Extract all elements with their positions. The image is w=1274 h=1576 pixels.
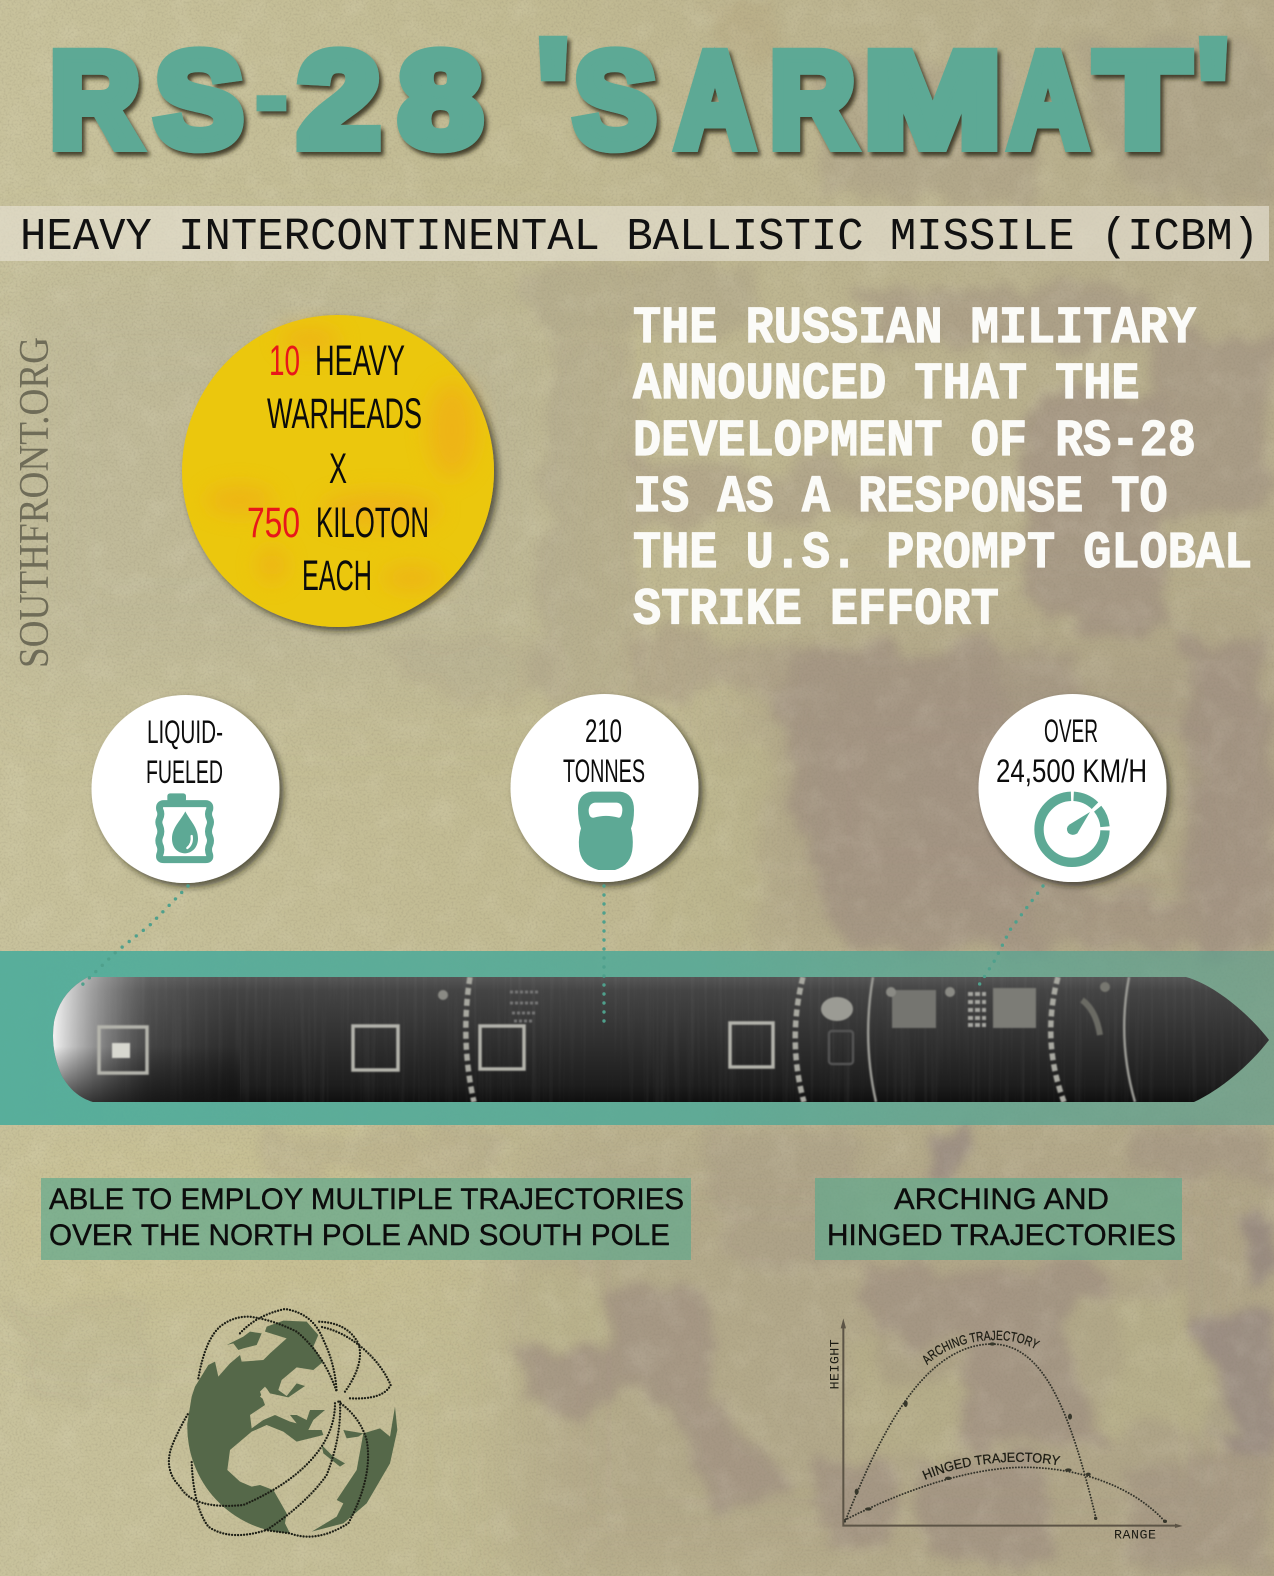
title: R [770, 26, 855, 175]
statement text: ANNOUNCED THAT THE [633, 355, 1140, 414]
label: FUELED [146, 754, 223, 790]
trajectory chart: HINGED TRAJECTORY [922, 1452, 1060, 1480]
trajectory chart: HEIGHT [829, 1339, 844, 1389]
title: S [574, 26, 656, 175]
missile hatches [99, 1023, 773, 1073]
icon: speedometer [1039, 796, 1105, 862]
title: A [676, 26, 754, 175]
label: LIQUID- [147, 714, 223, 750]
icon: kettlebell [578, 792, 634, 870]
subtitle: HEAVY INTERCONTINENTAL BALLISTIC MISSILE (ICBM) [20, 211, 1259, 263]
trajectory chart: ARCHING TRAJECTORY [922, 1330, 1040, 1366]
label: 24,500 KM/H [996, 753, 1147, 789]
curve markers [855, 1342, 1167, 1523]
statement text: THE U.S. PROMPT GLOBAL [633, 524, 1252, 583]
title: ' [538, 14, 568, 163]
hinged curve [845, 1467, 1165, 1522]
warheads text [247, 337, 429, 600]
missile panels and markings [438, 982, 1110, 1035]
teal missile band [0, 951, 1274, 1125]
dotted leader lines [82, 886, 1043, 1028]
title: R [50, 26, 140, 175]
warheads text: X [329, 445, 347, 493]
title: - [252, 18, 291, 167]
title: S [155, 26, 243, 175]
chart labels [927, 1340, 1041, 1365]
arching curve [845, 1344, 1096, 1522]
statement text: DEVELOPMENT OF RS-28 [633, 412, 1196, 471]
callout: arching and hinged: HINGED TRAJECTORIES [827, 1219, 1176, 1252]
warheads text: KILOTON [316, 499, 429, 547]
stat: liquid-fueled [92, 695, 280, 883]
statement text: IS AS A RESPONSE TO [633, 468, 1168, 527]
warheads text: HEAVY [315, 337, 405, 385]
title: 2 [298, 26, 380, 175]
label: 210 [585, 713, 622, 749]
label [563, 713, 645, 789]
label [146, 714, 223, 790]
warheads text: 750 [247, 499, 300, 547]
statement text [633, 299, 1252, 639]
watermark: southfront.org: SOUTHFRONT.ORG [12, 337, 58, 668]
missile [50, 975, 1272, 1105]
label: OVER [1044, 713, 1098, 749]
callout: polar trajectories: ABLE TO EMPLOY MULTIPLE TRAJECTORIES [49, 1183, 684, 1216]
statement text: THE RUSSIAN MILITARY [633, 299, 1196, 358]
warheads text: 10 [269, 337, 300, 385]
title: A [1009, 26, 1087, 175]
label [996, 713, 1147, 789]
orbit paths [169, 1309, 391, 1537]
warheads text: WARHEADS [267, 390, 422, 438]
trajectory chart [829, 1318, 1182, 1543]
title: T [1096, 26, 1189, 175]
callout: arching and hinged [815, 1178, 1182, 1260]
callout: arching and hinged: ARCHING AND [894, 1183, 1109, 1216]
callout: polar trajectories: OVER THE NORTH POLE AND SOUTH POLE [49, 1219, 670, 1252]
callout: polar trajectories [41, 1178, 691, 1260]
yellow warheads circle [182, 315, 494, 627]
globe with orbits [169, 1309, 397, 1537]
title: M [864, 26, 1001, 175]
land masses [187, 1321, 397, 1533]
stat: tonnes [510, 694, 698, 882]
subtitle band [0, 206, 1269, 263]
warheads text: EACH [302, 552, 372, 600]
trajectory chart: RANGE [1114, 1528, 1156, 1543]
axes [841, 1318, 1183, 1528]
label: TONNES [563, 753, 645, 789]
missile stage rings [466, 977, 1064, 1102]
icon: fuel barrel [159, 793, 210, 860]
title: 8 [399, 26, 482, 175]
title: ' [1198, 14, 1228, 163]
stat: speed [978, 694, 1166, 882]
statement text: STRIKE EFFORT [633, 581, 999, 639]
